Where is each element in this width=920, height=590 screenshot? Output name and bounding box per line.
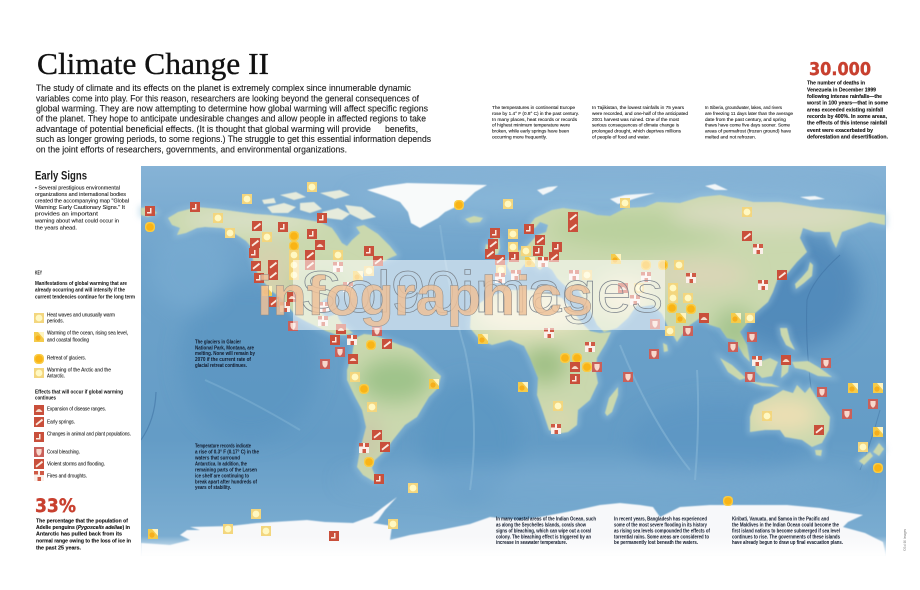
greenland — [367, 183, 487, 228]
text block: Europe: In many places, heat records or records — [492, 117, 578, 123]
text block: Tajikistan — [592, 105, 688, 140]
text block: Bangladesh: torrential rains. Some areas are considered to — [614, 534, 709, 540]
key subheading: future effects — [35, 390, 123, 402]
text block: Indian Ocean corals: as along the Seychelles Islands, corals show — [496, 522, 586, 528]
panel: early signs intro: provides an important — [35, 212, 99, 218]
key item: populations — [34, 432, 131, 442]
map note: Antarctica temperatures — [194, 444, 259, 491]
text block: Siberia: date from the past century, and spring — [705, 117, 786, 123]
watermark: Sol90images — [300, 260, 663, 325]
key item: arctic warming: Antarctic. — [47, 374, 65, 380]
callout: 30.000 deaths: the effects of this intense rainfall — [807, 121, 887, 127]
bottom fade — [141, 536, 887, 557]
intro text block: global warming. They are now attempting to determine how global warming will affect specific regions — [36, 104, 429, 114]
credit: ©Sol 90 Images — [902, 529, 907, 551]
callout: 33% penguins: 33% — [35, 495, 76, 517]
map note: Antarctica temperatures: years of stability. — [195, 485, 232, 491]
key item: heat waves: Heat waves and unusually warm — [47, 313, 115, 319]
panel: early signs intro: • Several prestigious environmental — [35, 186, 120, 192]
key item: heat waves: periods. — [47, 319, 64, 325]
callout: 33% penguins: Antarctic has pulled back from its — [36, 532, 122, 538]
panel: early signs intro: organizations and international bodies — [35, 192, 127, 198]
map markers: Europe and Africa — [454, 199, 633, 434]
key item: early springs: Early springs. — [47, 420, 75, 426]
callout: 30.000 deaths: The number of deaths in — [807, 81, 865, 87]
callout: 33% penguins — [35, 495, 131, 552]
callout: 30.000 deaths — [806, 59, 889, 141]
arctic islands — [537, 184, 825, 204]
panel: key legend: current tendencies continue for the long term — [35, 294, 136, 300]
text block: island nations: continues to rise. The governments of these islands — [732, 534, 840, 540]
panel: early signs intro: created the accompanying map "Global — [35, 198, 129, 204]
callout: 33% penguins: the past 25 years. — [36, 546, 81, 552]
continents — [141, 183, 886, 556]
text block: Bangladesh — [614, 517, 710, 546]
key subheading: future effects: continues — [35, 396, 56, 402]
callout: 30.000 deaths: areas exceeded existing rainfall — [807, 107, 883, 113]
map markers: South America — [320, 335, 439, 493]
text block: Tajikistan: of people of food and water. — [592, 134, 650, 140]
watermark: infographics — [257, 264, 593, 327]
text block: island nations — [732, 517, 844, 546]
callout: 30.000 deaths: event were exacerbated by — [807, 128, 874, 134]
intro text block: benefits, — [385, 124, 418, 134]
canadian arctic islands — [262, 190, 376, 220]
text block: Indian Ocean corals: In many coastal areas of the Indian Ocean, such — [496, 517, 596, 523]
map note: glaciers: The glaciers in Glacier — [195, 339, 241, 345]
callout: 30.000 deaths: Venezuela in December 1999 — [807, 87, 877, 93]
intro text block: variables come into play. For this reason, researchers are looking beyond the general consequences of — [36, 93, 420, 103]
map note: Antarctica temperatures: a rise of 0.3° F (0.17° C) in the — [195, 450, 259, 456]
key item: arctic warming — [34, 368, 111, 380]
key item: ocean warming: and coastal flooding — [47, 338, 89, 344]
text block: Bangladesh: In recent years, Bangladesh has experienced — [614, 517, 707, 523]
key item: disease — [34, 405, 106, 415]
panel: key legend: already occurring and will intensify if the — [35, 288, 125, 294]
text block: Bangladesh: as rising sea levels compounded the effects of — [614, 528, 710, 534]
panel: early signs intro: Warning: Early Cautionary Signs." It — [35, 205, 126, 211]
key item: coral bleaching — [34, 447, 80, 457]
text block: Siberia: thaws have come five days sooner. Some — [705, 123, 790, 129]
text block: Siberia: melted and not refrozen. — [705, 134, 756, 140]
callout: 33% penguins: Adelie penguins (Pygoscelis adeliae) in — [36, 525, 130, 531]
map markers: North America — [145, 182, 383, 336]
map note: glaciers: melting. None will remain by — [195, 351, 255, 357]
intro text block — [36, 83, 432, 154]
key subheading: future effects: Effects that will occur if global warming — [35, 390, 123, 396]
map note: Antarctica temperatures: ice shelf are continuing to — [195, 473, 249, 479]
text block: Europe: rose by 1.4° F (0.8° C) in the past century. — [492, 111, 579, 117]
callout: 30.000 deaths: 30.000 — [809, 59, 871, 80]
text block: Europe: occurring more frequently. — [492, 134, 547, 140]
text block: Europe: broken, while early springs have been — [492, 129, 569, 135]
text block: Indian Ocean corals: signs of bleaching, which can wipe out a coral — [496, 528, 592, 534]
key item: heat waves — [34, 313, 115, 325]
callout: 33% penguins: The percentage that the population of — [36, 518, 128, 524]
key item: storms: Violent storms and flooding. — [47, 462, 105, 468]
map note: Antarctica temperatures: remaining parts of the Larsen — [195, 467, 257, 473]
key item: early springs — [34, 417, 75, 427]
map note: Antarctica temperatures: waters that surround — [194, 456, 240, 462]
key item: storms — [34, 459, 105, 469]
map markers: Asia — [611, 198, 831, 382]
key item: glaciers: Retreat of glaciers. — [47, 356, 86, 362]
intro text block: on the joint efforts of researchers, governments, and environmental organizations. — [36, 144, 347, 154]
map note: Antarctica temperatures: Temperature records indicate — [195, 444, 251, 450]
text block: Indian Ocean corals: increase in seawater temperature. — [496, 540, 568, 546]
text block: island nations: the Maldives in the Indian Ocean could become the — [732, 522, 839, 528]
key item: arctic warming: Warming of the Arctic and the — [47, 368, 111, 374]
text block: island nations: have already begun to draw up final evacuation plans. — [732, 540, 844, 546]
world map — [141, 166, 887, 557]
map markers: Oceania — [762, 383, 883, 473]
panel: early signs intro — [35, 170, 129, 231]
key item: ocean warming — [34, 331, 128, 344]
panel: key legend — [34, 270, 136, 481]
text block: Tajikistan: prolonged drought, which deprives millions — [592, 129, 682, 135]
callout: 33% penguins: normal range owing to the loss of ice in — [36, 538, 131, 544]
callout: 30.000 deaths: records by 400%. In some areas, — [807, 114, 887, 120]
text block: Tajikistan: serious consequences of climate change is — [592, 123, 680, 129]
title: Climate Change II — [37, 47, 269, 81]
panel: early signs intro: warning about what could occur in — [35, 219, 119, 225]
key item: ocean warming: Warming of the ocean, rising sea level, — [47, 331, 128, 337]
intro text block: The study of climate and its effects on the planet is extremely complex since innumerable dynamic — [36, 83, 412, 93]
text block: Tajikistan: were recorded, and one-half of the anticipated — [592, 111, 688, 117]
text block: Bangladesh: some of the most severe flooding in its history — [614, 522, 707, 528]
antarctica — [141, 497, 886, 556]
key item: coral bleaching: Coral bleaching. — [47, 450, 80, 456]
text block: Siberia: are freezing 11 days later than the average — [705, 111, 793, 117]
text block: Siberia: areas of permafrost (frozen ground) have — [705, 129, 791, 135]
key item: fires: Fires and droughts. — [47, 474, 87, 480]
panel: early signs intro: Early Signs — [35, 170, 87, 182]
intro text block: advantage of potential beneficial effects. (It is thought that global warming will provide — [36, 124, 371, 134]
text block: Tajikistan: In Tajikistan, the lowest rainfalls in 75 years — [592, 105, 685, 111]
ocean ridges and trenches — [141, 225, 880, 490]
key item: fires — [34, 471, 87, 481]
key item: glaciers — [34, 354, 86, 364]
text block: island nations: Kiribati, Vanuatu, and Samoa in the Pacific and — [732, 517, 829, 523]
map note: glaciers — [195, 339, 255, 369]
text block: Indian Ocean corals: colony. The bleaching effect is triggered by an — [496, 534, 591, 540]
panel: key legend: Manifestations of global warming that are — [35, 281, 127, 287]
text block: Indian Ocean corals — [496, 517, 596, 546]
intro text block: of the planet. They hope to anticipate undesirable changes and allow people in affected regions to take — [36, 114, 426, 124]
callout: 30.000 deaths: deforestation and desertification. — [807, 135, 888, 141]
map note: Antarctica temperatures: break apart after hundreds of — [195, 479, 257, 485]
text block: Siberia: In Siberia, groundwater, lakes, and rivers — [705, 105, 782, 111]
text block: Europe: The temperatures in continental Europe — [492, 105, 575, 111]
ocean — [141, 166, 886, 556]
map note: Antarctica temperatures: Antarctica. In addition, the — [195, 461, 247, 467]
map note: glaciers: 2070 if the current rate of — [195, 357, 251, 363]
panel: early signs intro: the years ahead. — [35, 225, 77, 231]
continental shelf glow — [141, 195, 885, 481]
callout: 30.000 deaths: worst in 100 years—that in some — [806, 101, 889, 107]
map note: glaciers: glacial retreat continues. — [195, 363, 248, 369]
key item: populations: Changes in animal and plant populations. — [47, 432, 131, 438]
intro text block: such as longer growing periods, to some regions.) The struggle to get this essential information depends — [36, 134, 432, 144]
text block: Siberia — [705, 105, 793, 140]
callout: 30.000 deaths: following intense rainfalls—the — [807, 94, 883, 100]
key item: disease: Expansion of disease ranges. — [47, 407, 106, 413]
text block: Europe: of highest minimum temperature were — [492, 123, 570, 129]
text block: Tajikistan: 2001 harvest was ruined. One of the most — [592, 117, 680, 123]
text block: Bangladesh: be permanently lost beneath the waters. — [614, 540, 699, 546]
text block: island nations: first island nations to become submerged if sea level — [732, 528, 841, 534]
text block: Europe — [492, 105, 579, 140]
map markers: Antarctica — [148, 496, 733, 541]
map note: glaciers: National Park, Montana, are — [195, 345, 254, 351]
panel: key legend: KEY — [35, 270, 42, 276]
